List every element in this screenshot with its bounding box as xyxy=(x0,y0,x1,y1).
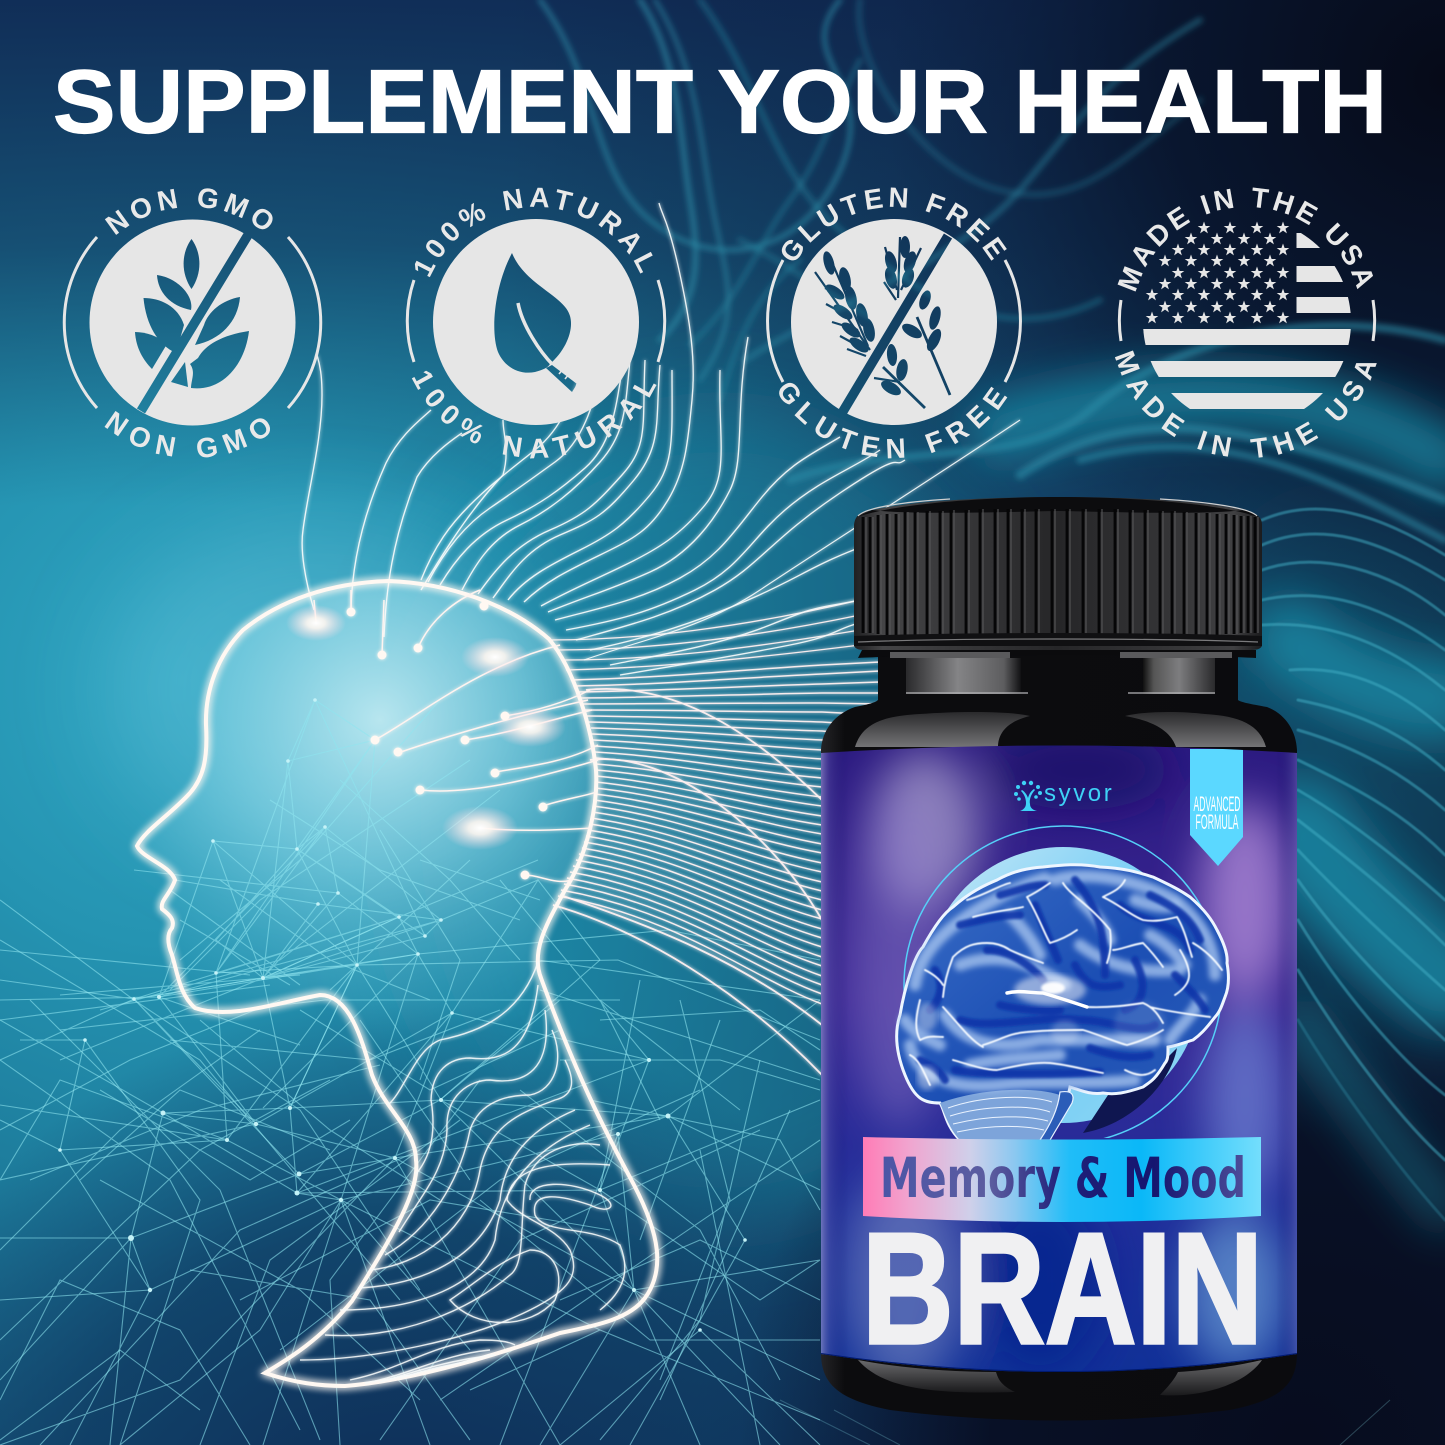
glowing nodes xyxy=(286,602,566,880)
label: FORMULA xyxy=(1196,811,1238,834)
brain highlights xyxy=(917,975,1166,1090)
text top: GLUTEN FREE xyxy=(782,188,1007,261)
icon: crossed-out plant xyxy=(90,220,296,426)
brain illustration xyxy=(897,865,1228,1140)
badge: non gmo xyxy=(62,188,322,458)
brain folds xyxy=(905,876,1222,1086)
glow inside head xyxy=(110,520,651,1360)
advanced formula ribbon xyxy=(1190,749,1243,866)
ring arcs xyxy=(64,237,321,408)
product bottle xyxy=(820,497,1300,1420)
title: SUPPLEMENT YOUR HEALTH xyxy=(53,52,1387,152)
cerebellum xyxy=(940,1090,1073,1140)
bottle cap xyxy=(854,497,1262,658)
circular emblem behind brain xyxy=(904,826,1222,1144)
badge: gluten free xyxy=(766,188,1022,458)
text top: NON GMO xyxy=(104,188,273,235)
teal light ribbons top and right side xyxy=(540,0,1445,1220)
memory and mood band xyxy=(863,1137,1261,1222)
head outline xyxy=(137,581,657,1386)
badge: 100% natural xyxy=(406,188,666,458)
label xyxy=(820,730,1300,1395)
text bottom: GLUTEN FREE xyxy=(779,382,1008,458)
network mesh lines xyxy=(0,700,1390,1445)
text bottom: 100% NATURAL xyxy=(412,370,656,458)
hair lines fanning to the right xyxy=(548,600,880,1075)
brain product name: BRAIN xyxy=(862,1201,1263,1377)
memory and mood band: Memory & Mood xyxy=(880,1146,1246,1210)
label bottom shade line xyxy=(821,1354,1297,1372)
network nodes xyxy=(58,698,747,1332)
neck contour lines xyxy=(300,962,625,1383)
badge: made in the usa xyxy=(1114,188,1377,458)
neck and shoulder highlights xyxy=(855,658,1266,1395)
text top: MADE IN THE USA xyxy=(1118,188,1373,292)
head nerve lines with nodes xyxy=(314,590,598,881)
icon: flag circle xyxy=(1140,222,1356,409)
ring arcs xyxy=(1119,300,1375,341)
flowing lines rising from the head xyxy=(302,203,1020,675)
label: ADVANCED xyxy=(1194,793,1240,816)
tree icon xyxy=(1014,781,1042,811)
ring arcs xyxy=(407,280,665,362)
text bottom: MADE IN THE USA xyxy=(1109,347,1385,464)
text top: 100% NATURAL xyxy=(414,188,653,278)
bottle body xyxy=(821,655,1297,1420)
icon: leaf xyxy=(433,219,639,425)
ring arcs xyxy=(768,260,1020,382)
text bottom: NON GMO xyxy=(104,411,270,458)
icon: crossed-out wheat xyxy=(791,219,997,425)
brand name: syvor xyxy=(1044,780,1114,807)
brand logo xyxy=(1014,780,1114,811)
